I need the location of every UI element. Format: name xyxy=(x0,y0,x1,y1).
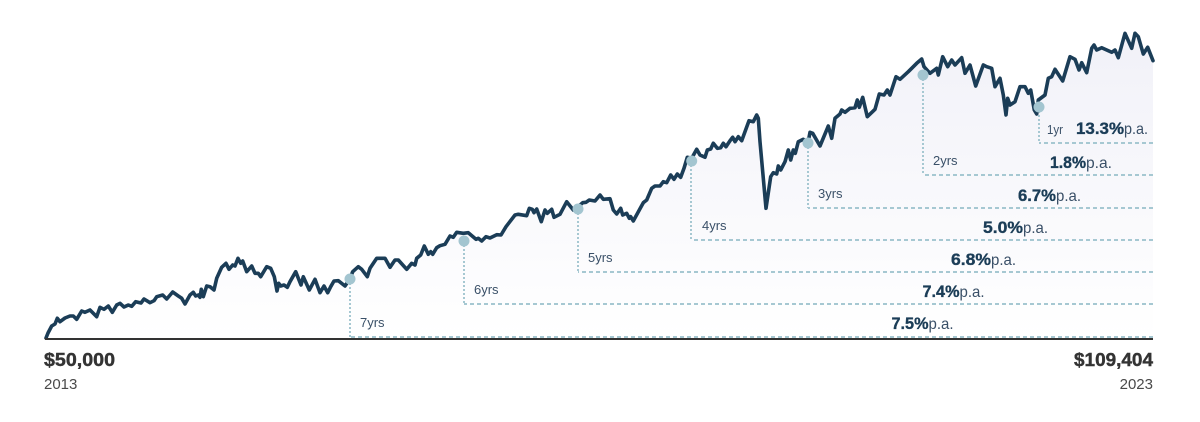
1 year return: 1yr xyxy=(1047,122,1064,137)
4 year return: p.a. xyxy=(1023,220,1048,237)
6 year return: 6yrs xyxy=(474,282,499,297)
3 year return: p.a. xyxy=(1056,188,1081,205)
2 year return: p.a. xyxy=(1086,155,1112,172)
portfolio value line xyxy=(46,33,1153,338)
1 year return xyxy=(1047,119,1148,138)
7 year return: 7yrs xyxy=(360,315,385,330)
2 year return: 2yrs xyxy=(933,153,958,168)
1 year return: 13.3% xyxy=(1076,119,1124,138)
area fill under the line xyxy=(46,33,1153,338)
4 year return xyxy=(702,218,1048,237)
end value label: $109,404 xyxy=(1074,350,1153,370)
2 year return xyxy=(933,153,1112,172)
baseline axis xyxy=(45,338,1153,340)
4 year return: 4yrs xyxy=(702,218,727,233)
5 year return: 5yrs xyxy=(588,250,613,265)
7 year return: 7.5% xyxy=(892,314,928,333)
2 year return: 1.8% xyxy=(1050,153,1086,172)
6 year return: 7.4% xyxy=(922,282,960,301)
period start markers xyxy=(344,70,1044,284)
6 year return xyxy=(474,282,984,301)
5 year return: p.a. xyxy=(991,252,1016,269)
end value label xyxy=(1074,350,1153,393)
4 year return: 5.0% xyxy=(983,218,1023,237)
3 year return: 3yrs xyxy=(818,186,843,201)
7 year return: p.a. xyxy=(928,316,954,333)
end value label: 2023 xyxy=(1120,376,1153,393)
5 year return: 6.8% xyxy=(951,250,991,269)
5 year return xyxy=(588,250,1016,269)
7 year return xyxy=(360,314,954,333)
dashed return brackets xyxy=(350,75,1153,337)
3 year return: 6.7% xyxy=(1018,186,1056,205)
6 year return: p.a. xyxy=(960,284,984,301)
1 year return: p.a. xyxy=(1124,121,1148,138)
start value label: $50,000 xyxy=(44,350,115,370)
start value label xyxy=(44,350,115,393)
start value label: 2013 xyxy=(44,376,77,393)
3 year return xyxy=(818,186,1081,205)
